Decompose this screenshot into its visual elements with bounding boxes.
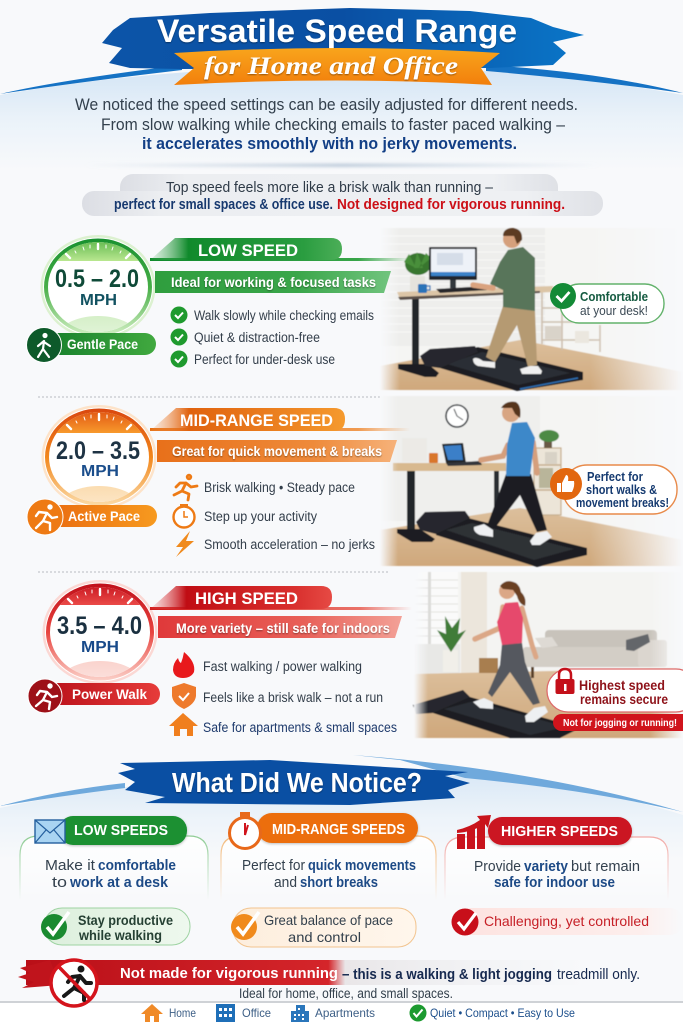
text: Make it <box>45 857 96 874</box>
card: mid-range speeds: quick movements <box>308 857 416 874</box>
card: higher speeds: HIGHER SPEEDS <box>501 823 618 840</box>
panel: low speed <box>26 228 683 391</box>
card: low speeds: Stay productive <box>78 913 173 928</box>
benefit list: Walk slowly while checking emails <box>194 308 374 323</box>
speed gauge: 0.5 – 2.0 MPH <box>40 235 155 333</box>
card: higher speeds: but remain <box>571 858 640 875</box>
woman <box>473 581 548 722</box>
callout: comfortable at your desk: Comfortable <box>580 290 648 304</box>
icon: stopwatch <box>230 812 260 848</box>
monitor <box>429 247 487 293</box>
callout: comfortable at your desk: at your desk! <box>580 304 648 318</box>
plant <box>437 616 466 672</box>
speed gauge: 3.5 – 4.0 MPH: MPH <box>81 639 119 656</box>
warning banner: Ideal for home, office, and small spaces. <box>239 986 453 1001</box>
section heading: what did we notice <box>0 755 683 860</box>
callout: short walks and breaks: Perfect for <box>587 470 643 484</box>
photo: man at desk on treadmill <box>380 228 683 391</box>
card: mid-range speeds: MID-RANGE SPEEDS <box>272 821 405 838</box>
heading ribbon: high speed: HIGH SPEED <box>195 589 298 608</box>
sub-pill <box>44 908 190 945</box>
badge: active pace: Active Pace <box>68 509 140 524</box>
benefit list: Feels like a brisk walk – not a run <box>203 690 383 705</box>
card: low speeds: to <box>52 874 67 891</box>
callout: top speed note <box>82 174 603 216</box>
callout: short walks and breaks: short walks & <box>586 483 657 497</box>
heading ribbon: mid-range speed <box>150 408 410 431</box>
benefit list <box>169 652 397 736</box>
badge: power walk: Power Walk <box>72 687 147 702</box>
intro text: From slow walking while checking emails to faster paced walking – <box>101 115 566 134</box>
header background arc <box>0 65 683 170</box>
orange ribbon <box>174 48 500 85</box>
icon: house <box>169 713 198 736</box>
intro text: it accelerates smoothly with no jerky movements. <box>142 134 517 153</box>
speed gauge: 2.0 – 3.5 MPH: MPH <box>81 463 119 480</box>
badge: active pace <box>27 499 157 535</box>
callout: highest speed remains secure: Highest speed <box>579 678 665 693</box>
benefit list: Fast walking / power walking <box>203 659 362 674</box>
sofa <box>523 630 667 678</box>
treadmill <box>416 511 587 567</box>
card: higher speeds <box>445 815 683 936</box>
heading ribbon: low speed <box>150 238 410 261</box>
callout: highest speed remains secure: remains secure <box>580 692 668 707</box>
card: mid-range speeds: Great balance of pace <box>264 912 393 928</box>
desk <box>412 298 419 366</box>
intro text <box>75 95 578 153</box>
icon: office <box>216 1004 235 1022</box>
footer: Home <box>169 1006 196 1020</box>
icon: padlock <box>556 669 574 694</box>
man <box>473 228 542 374</box>
panel: mid-range speed <box>27 396 683 567</box>
card: low speeds: comfortable <box>98 857 176 874</box>
speed gauge: 2.0 – 3.5 MPH <box>42 405 156 505</box>
card: higher speeds: safe for indoor use <box>494 874 615 891</box>
badge: gentle pace: Gentle Pace <box>67 337 138 352</box>
sub-banner <box>155 271 391 293</box>
icon: runner <box>174 475 197 500</box>
footer: Apartments <box>315 1006 375 1020</box>
benefit list: Safe for apartments & small spaces <box>203 720 397 735</box>
window and curtain <box>414 572 458 644</box>
speed gauge: 2.0 – 3.5 MPH: 2.0 – 3.5 <box>56 437 140 465</box>
icon: envelope <box>35 820 65 843</box>
card: low speeds: while walking <box>78 928 162 943</box>
card: low speeds <box>20 816 208 945</box>
callout: short walks and breaks <box>550 465 677 514</box>
warning tag <box>553 714 683 731</box>
subtitle: for Home and Office <box>204 51 458 80</box>
footer: Office <box>242 1006 271 1020</box>
heading ribbon: high speed <box>150 586 412 610</box>
footer <box>0 1001 683 1024</box>
sub-pill <box>458 908 683 935</box>
plant and mug <box>404 252 431 293</box>
benefit list <box>170 306 374 368</box>
icon: lightning <box>176 531 194 557</box>
warning banner: – this is a walking & light jogging <box>342 967 552 983</box>
benefit list: Quiet & distraction-free <box>194 330 320 345</box>
heading pill <box>488 817 632 845</box>
speed gauge: 3.5 – 4.0 MPH <box>42 580 158 683</box>
card: mid-range speeds <box>221 812 436 947</box>
photo: woman power walking in living room <box>413 572 683 738</box>
card: mid-range speeds: and control <box>288 929 361 945</box>
wall clock <box>446 405 468 427</box>
sub-banner <box>158 616 402 638</box>
title banner <box>102 8 584 85</box>
intro text: We noticed the speed settings can be easily adjusted for different needs. <box>75 95 578 114</box>
warning banner: treadmill only. <box>557 967 640 983</box>
warning banner: Not made for vigorous running <box>120 966 338 982</box>
icon: no running sign <box>51 960 97 1006</box>
icon: home <box>141 1004 163 1022</box>
section heading: what did we notice: What Did We Notice? <box>172 767 422 798</box>
callout: top speed note: perfect for small spaces & office use. <box>114 197 333 213</box>
speed gauge: 0.5 – 2.0 MPH: 0.5 – 2.0 <box>55 265 139 293</box>
icon: shield <box>172 683 196 709</box>
treadmill <box>420 346 583 391</box>
text: Perfect for <box>242 857 305 874</box>
shelf <box>542 290 600 352</box>
heading ribbon: mid-range speed: MID-RANGE SPEED <box>180 411 333 430</box>
sub-banner: More variety – still safe for indoors <box>176 621 390 636</box>
callout: highest speed remains secure <box>547 669 683 731</box>
benefit list: Smooth acceleration – no jerks <box>204 537 375 552</box>
heading pill <box>257 813 418 843</box>
card: low speeds: work at a desk <box>69 874 169 891</box>
speed gauge: 0.5 – 2.0 MPH: MPH <box>80 292 117 309</box>
heading ribbon: low speed: LOW SPEED <box>198 241 298 260</box>
speed gauge: 3.5 – 4.0 MPH: 3.5 – 4.0 <box>57 612 142 640</box>
icon: stopwatch <box>174 504 194 528</box>
card: low speeds: LOW SPEEDS <box>74 822 168 839</box>
sub-pill <box>233 908 416 947</box>
man <box>474 402 552 545</box>
side table <box>479 658 498 673</box>
shelf and plant <box>534 430 561 515</box>
benefit list: Brisk walking • Steady pace <box>204 480 355 495</box>
benefit list: Step up your activity <box>204 509 317 524</box>
text: Provide <box>474 858 521 875</box>
badge: gentle pace <box>26 328 156 362</box>
treadmill <box>413 690 580 738</box>
benefit list: Perfect for under-desk use <box>194 352 335 367</box>
panel: high speed <box>28 572 683 738</box>
edge fades <box>380 228 400 390</box>
callout: top speed note: Not designed for vigorous running. <box>337 197 565 213</box>
card: higher speeds: variety <box>524 858 569 875</box>
warning banner <box>18 960 640 1006</box>
card: higher speeds: Challenging, yet controlled <box>484 913 649 929</box>
sub-banner: Great for quick movement & breaks <box>172 444 382 459</box>
footer: Quiet • Compact • Easy to Use <box>430 1006 575 1020</box>
photo: man with laptop on treadmill <box>380 396 683 567</box>
card: mid-range speeds: short breaks <box>300 874 378 891</box>
icon: apartments <box>291 1005 309 1022</box>
badge: power walk <box>28 679 160 713</box>
desk <box>393 438 506 542</box>
sub-banner: Ideal for working & focused tasks <box>171 275 376 290</box>
benefit list <box>174 475 375 557</box>
icon: check <box>410 1004 426 1022</box>
callout: comfortable at your desk <box>550 283 664 323</box>
callout: top speed note: Top speed feels more like a brisk walk than running – <box>166 180 494 196</box>
icon: flame <box>173 652 194 678</box>
heading pill <box>59 816 187 845</box>
card: mid-range speeds: and <box>274 874 297 891</box>
sub-banner <box>157 440 397 462</box>
blue brush stroke <box>102 8 584 69</box>
icon: bar chart <box>457 815 491 849</box>
main title: Versatile Speed Range <box>157 13 517 49</box>
